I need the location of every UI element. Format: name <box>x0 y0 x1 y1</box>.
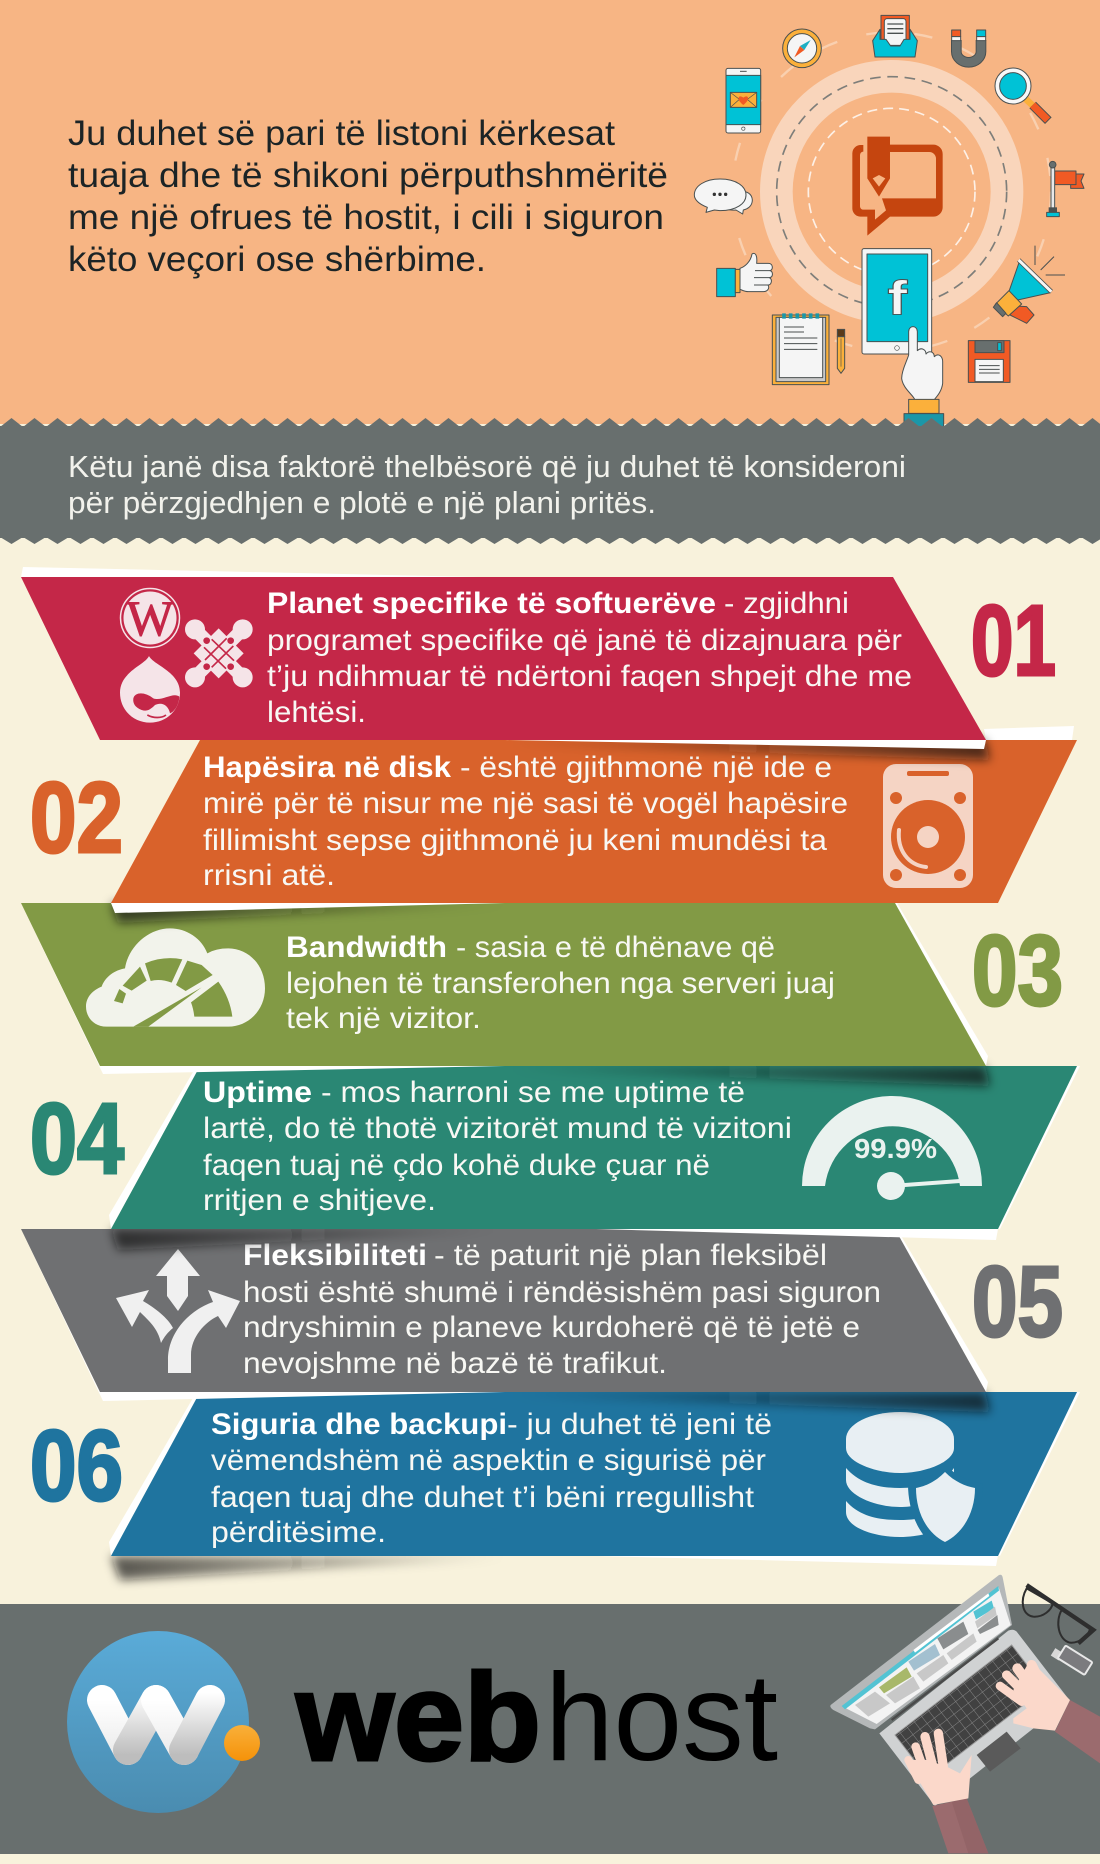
intro text: Këtu janë disa faktorë thelbësorë që ju duhet të konsideroni <box>68 449 906 484</box>
text <box>203 1076 792 1217</box>
text: Bandwidth <box>286 931 447 964</box>
panel 2: disk space <box>111 726 1077 923</box>
icon: mobile phone with mail <box>726 68 761 133</box>
text: programet specifike që janë të dizajnuara për <box>267 624 902 657</box>
number 03: 03 <box>972 915 1063 1027</box>
text <box>267 587 912 729</box>
text: hosti është shumë i rëndësishëm pasi siguron <box>243 1276 881 1309</box>
usb stick <box>1051 1645 1092 1675</box>
number 02: 02 <box>30 762 123 874</box>
panel 3: bandwidth <box>21 903 990 1086</box>
text: t’ju ndihmuar të ndërtoni faqen shpejt dhe me <box>267 660 912 693</box>
outer dashed orbit <box>732 32 1051 351</box>
right hand <box>1000 1660 1070 1731</box>
text: lehtësi. <box>267 696 366 729</box>
icon: joomla <box>185 619 253 687</box>
icon: drupal <box>120 656 180 723</box>
right sleeve <box>1055 1700 1100 1763</box>
header paragraph: Ju duhet së pari të listoni kërkesat <box>68 114 615 153</box>
text: fillimisht sepse gjithmonë ju keni mundësi ta <box>203 824 827 857</box>
header paragraph: këto veçori ose shërbime. <box>68 240 486 279</box>
text: lartë, do të thotë vizitorët mund të vizitoni <box>203 1112 792 1145</box>
text <box>286 931 835 1035</box>
intro text: për përzgjedhjen e plotë e një plani pritës. <box>68 485 656 520</box>
webhost wordmark <box>295 1649 778 1787</box>
text: mirë për të nisur me një sasi të vogël hapësire <box>203 787 848 820</box>
pale ring <box>776 76 1007 307</box>
glasses <box>1023 1585 1093 1643</box>
icon: magnet <box>952 30 986 62</box>
text: - zgjidhni <box>724 587 849 620</box>
icon: compass <box>783 29 821 68</box>
laptop desk illustration <box>830 1575 1100 1853</box>
text: nevojshme në bazë të trafikut. <box>243 1347 667 1380</box>
icon: pointing hand <box>902 327 944 430</box>
icon: wordpress: W <box>126 590 174 646</box>
header paragraph <box>68 114 668 279</box>
icon: tablet with facebook f: f <box>887 271 908 325</box>
icon: inbox tray <box>873 15 917 57</box>
text: - është gjithmonë një ide e <box>460 751 832 784</box>
text: Planet specifike të softuerëve <box>267 587 716 620</box>
trackpad <box>977 1732 1021 1772</box>
laptop base <box>879 1630 1069 1806</box>
text: faqen tuaj dhe duhet t’i bëni rregullisht <box>211 1481 755 1514</box>
text: Fleksibiliteti <box>243 1239 427 1272</box>
webhost wordmark: host <box>545 1649 778 1787</box>
icon: notepad <box>772 313 829 385</box>
header illustration: social media icons around a circle <box>694 15 1084 430</box>
text: përditësime. <box>211 1516 386 1549</box>
number 06: 06 <box>30 1410 123 1522</box>
text: vëmendshëm në aspektin e sigurisë për <box>211 1444 766 1477</box>
gauge 99.9% <box>802 1096 982 1200</box>
grey intro band <box>0 418 1100 544</box>
text: - të paturit një plan fleksibël <box>434 1239 827 1272</box>
icon: tablet with facebook f <box>862 249 932 354</box>
text: tek një vizitor. <box>286 1002 481 1035</box>
left hand <box>907 1733 972 1805</box>
text: - sasia e të dhënave që <box>456 931 775 964</box>
icon: database with shield <box>846 1412 983 1552</box>
grey dashed circle <box>777 77 1007 307</box>
header paragraph: tuaja dhe të shikoni përputhshmëritë <box>68 156 668 195</box>
icon: diverging arrows <box>116 1249 240 1373</box>
header paragraph: me një ofrues të hostit, i cili i siguron <box>68 198 664 237</box>
text: Hapësira në disk <box>203 751 451 784</box>
text: - ju duhet të jeni të <box>507 1408 772 1441</box>
panel 1: software plans <box>21 567 990 760</box>
text: rritjen e shitjeve. <box>203 1184 436 1217</box>
text: ndryshimin e planeve kurdoherë që të jetë e <box>243 1311 860 1344</box>
text: Siguria dhe backupi <box>211 1408 507 1441</box>
icon: thumbs up <box>717 253 772 297</box>
panel 4: uptime <box>109 1066 1080 1250</box>
number 05: 05 <box>972 1246 1063 1358</box>
panel 6: security and backup <box>109 1392 1080 1580</box>
footer logo mark <box>67 1631 260 1813</box>
intro text <box>68 449 906 520</box>
text: - mos harroni se me uptime të <box>321 1076 745 1109</box>
icon: floppy disk <box>968 341 1010 382</box>
centre logo: pencil and speech frame <box>852 137 943 236</box>
icon: magnifier <box>995 68 1048 121</box>
number 01: 01 <box>971 585 1056 697</box>
top peach header background <box>0 0 1100 424</box>
text <box>211 1408 772 1549</box>
text: rrisni atë. <box>203 859 335 892</box>
white dashed circle <box>808 108 975 275</box>
text <box>203 751 848 892</box>
icon: chat bubbles <box>694 179 752 214</box>
text: lejohen të transferohen nga serveri juaj <box>286 967 835 1000</box>
text: Uptime <box>203 1076 312 1109</box>
left sleeve <box>932 1798 988 1853</box>
laptop screen <box>830 1575 1012 1729</box>
text: faqen tuaj në çdo kohë duke çuar në <box>203 1149 710 1182</box>
icon: flag <box>1047 161 1084 217</box>
gauge 99.9%: 99.9% <box>854 1133 937 1164</box>
icon: cloud speedometer <box>86 928 265 1027</box>
number 04: 04 <box>30 1083 124 1195</box>
icon: pencil <box>837 329 845 373</box>
keyboard <box>895 1645 1045 1778</box>
text <box>243 1239 881 1380</box>
webhost wordmark: web <box>295 1649 541 1787</box>
orange dot <box>224 1725 260 1761</box>
icon: megaphone <box>993 246 1065 323</box>
footer band <box>0 1604 1100 1854</box>
panel 5: flexibility <box>21 1229 990 1412</box>
icon: hard disk <box>883 764 973 888</box>
